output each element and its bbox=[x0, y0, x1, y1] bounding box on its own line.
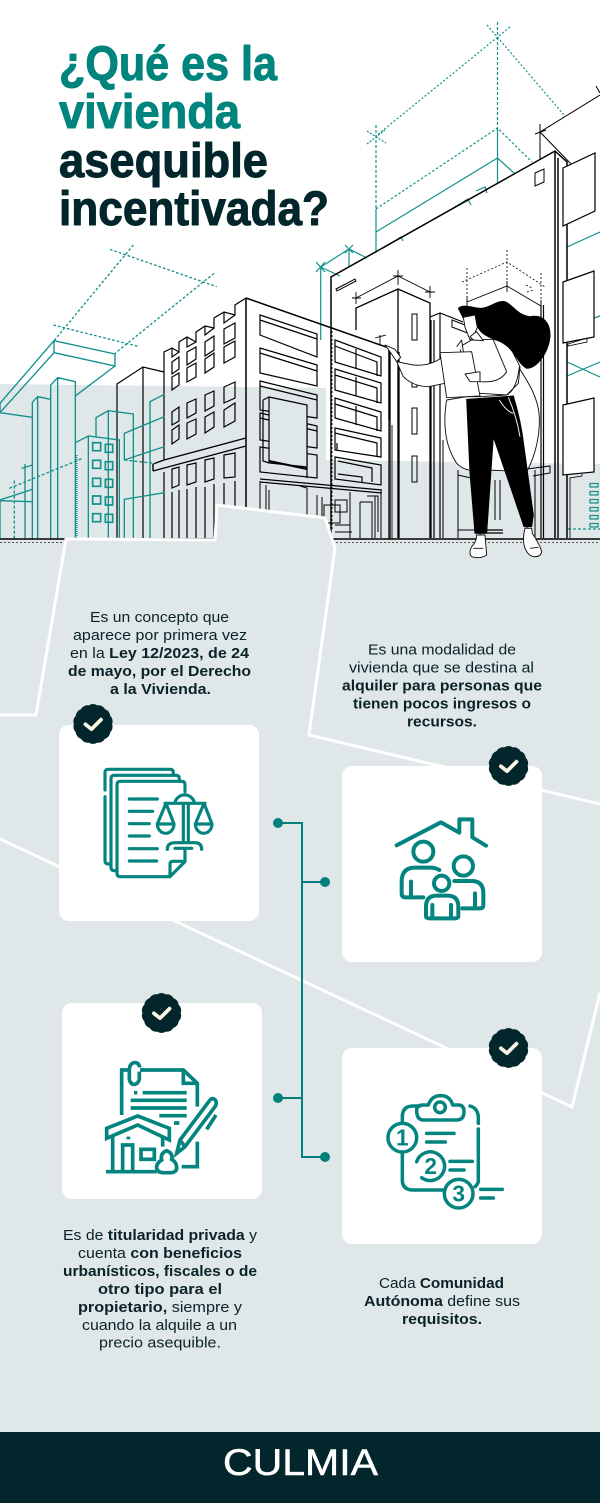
numerals: 2 bbox=[424, 1153, 437, 1179]
icon: family under roof bbox=[397, 819, 486, 918]
text block: ley: aparece por primera vez bbox=[73, 627, 247, 644]
card: ley document bbox=[59, 704, 259, 921]
text block: titularidad: precio asequible. bbox=[99, 1334, 221, 1352]
middle towers bbox=[352, 250, 550, 538]
text block: comunidad autónoma: Cada Comunidad bbox=[379, 1275, 504, 1292]
text block: ley bbox=[68, 609, 251, 698]
text block: titularidad: cuenta con beneficios bbox=[78, 1245, 242, 1262]
teal blueprint lines, upper right bbox=[316, 22, 600, 529]
numerals: 1 bbox=[396, 1125, 409, 1151]
title: ¿Qué es la bbox=[59, 38, 277, 91]
gray panel with white outline bbox=[0, 505, 600, 1107]
icon: check badge bbox=[489, 1028, 528, 1068]
text block: titularidad: otro tipo para el bbox=[98, 1281, 222, 1298]
connector lines bbox=[273, 818, 330, 1162]
text block: titularidad: urbanísticos, fiscales o de bbox=[63, 1263, 257, 1280]
text block: ley: a la Vivienda. bbox=[110, 681, 211, 698]
icon: check badge bbox=[73, 704, 113, 744]
icon: documents with scales bbox=[105, 769, 212, 877]
logo: CULMIA: CULMIA bbox=[223, 1442, 378, 1483]
title: vivienda bbox=[59, 86, 240, 139]
text block: ley: en la Ley 12/2023, de 24 bbox=[70, 645, 250, 662]
text block: alquiler: Es una modalidad de bbox=[368, 642, 516, 658]
text block: alquiler: recursos. bbox=[407, 714, 477, 730]
title: asequible bbox=[59, 135, 268, 188]
icon: numbered clipboard bbox=[388, 1096, 502, 1208]
front black building, right face bbox=[246, 298, 392, 540]
icon: check badge bbox=[489, 746, 528, 786]
text block: comunidad autónoma bbox=[364, 1275, 520, 1328]
text block: ley: Es un concepto que bbox=[90, 609, 229, 626]
text block: alquiler: tienen pocos ingresos o bbox=[353, 696, 531, 712]
icon: contract, house and pen bbox=[106, 1063, 216, 1173]
text block: alquiler: vivienda que se destina al bbox=[349, 660, 534, 676]
front black building, left face bbox=[117, 298, 246, 538]
woman with clipboard bbox=[385, 301, 550, 558]
text block: titularidad bbox=[63, 1227, 258, 1352]
text block: titularidad: cuando la alquile a un bbox=[82, 1317, 237, 1334]
big black building, right bbox=[331, 86, 600, 538]
ground line bbox=[0, 539, 600, 542]
illustration: city skyline with woman bbox=[0, 22, 600, 558]
numerals bbox=[396, 1125, 465, 1207]
teal left buildings bbox=[0, 245, 217, 538]
text block: titularidad: Es de titularidad privada y bbox=[63, 1227, 258, 1244]
text block: alquiler bbox=[342, 642, 542, 730]
text block: comunidad autónoma: Autónoma define sus bbox=[364, 1293, 520, 1310]
title bbox=[59, 38, 329, 236]
text block: alquiler: alquiler para personas que bbox=[342, 678, 542, 694]
title: incentivada? bbox=[59, 183, 329, 236]
footer bbox=[0, 1432, 600, 1503]
icon: check badge bbox=[142, 993, 181, 1033]
numerals: 3 bbox=[452, 1181, 465, 1207]
text block: titularidad: propietario, siempre y bbox=[78, 1299, 243, 1316]
background band bbox=[0, 384, 600, 1432]
text block: ley: de mayo, por el Derecho bbox=[68, 663, 251, 680]
text block: comunidad autónoma: requisitos. bbox=[402, 1311, 482, 1328]
right-face window rows bbox=[335, 340, 381, 485]
card: titularidad privada bbox=[62, 993, 262, 1199]
card: requisitos bbox=[342, 1028, 542, 1244]
card: familia bbox=[342, 746, 542, 962]
